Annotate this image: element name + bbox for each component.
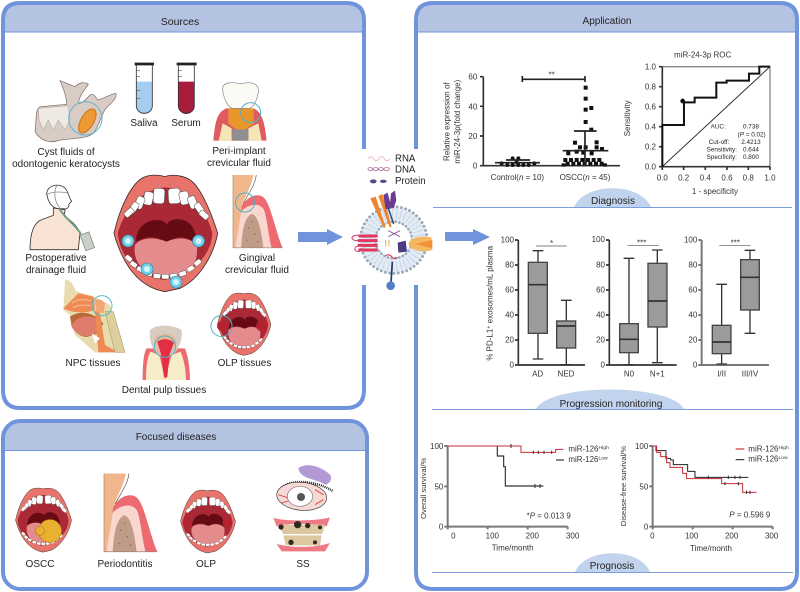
label: peri-implant crevicular fluid: Peri-implant xyxy=(212,146,266,157)
chart: overall survival: Overall survival/% xyxy=(419,458,428,519)
box plot: N0 vs N+1: 40 xyxy=(596,310,606,319)
chart: ROC curve: 0.6 xyxy=(721,174,733,183)
box plot: stage I/II vs III/IV: 40 xyxy=(688,311,698,320)
chart: miR-24-3p scatter: OSCC(n = 45) xyxy=(560,173,611,182)
chart: overall survival: miR-126 xyxy=(568,455,598,464)
legend: exosome cargo: Protein xyxy=(395,176,426,187)
chart: overall survival: 0 xyxy=(439,523,444,532)
heading: sources: Sources xyxy=(161,16,199,28)
icon: patient with drain xyxy=(30,185,95,251)
panel: application xyxy=(416,3,797,589)
box plot: AD vs NED: 100 xyxy=(501,236,515,245)
box plot: N0 vs N+1: *** xyxy=(637,238,646,247)
chart: disease-free survival: 0 xyxy=(644,523,649,532)
box plot: stage I/II vs III/IV: 60 xyxy=(688,286,698,295)
chart: overall survival: 100 xyxy=(486,531,500,540)
icon: OLP mouth xyxy=(181,490,235,553)
chart: box plots xyxy=(486,235,769,379)
icon: OSCC mouth xyxy=(16,488,72,552)
box plot: stage I/II vs III/IV: III/IV xyxy=(742,370,759,379)
chart: ROC curve: 0.8 xyxy=(645,83,657,92)
chart: miR-24-3p scatter: ** xyxy=(549,70,555,79)
chart: ROC curve: 1.0 xyxy=(645,63,657,72)
box plot: N0 vs N+1: 0 xyxy=(601,361,606,370)
box plot: N0 vs N+1: N+1 xyxy=(650,370,665,379)
legend: exosome cargo xyxy=(368,154,426,187)
chart: box plots: exosomes/mL plasma xyxy=(486,245,495,326)
chart: overall survival: *P = 0.013 9 xyxy=(527,511,571,520)
heading: focused diseases: Focused diseases xyxy=(136,432,216,443)
chart: disease-free survival: 50 xyxy=(639,482,649,491)
chart: box plots: + xyxy=(486,326,492,329)
box plot: N0 vs N+1: 100 xyxy=(592,235,606,244)
label: serum: Serum xyxy=(171,118,201,129)
section tab: diagnosis: Diagnosis xyxy=(591,196,635,207)
chart: ROC curve: 0.6 xyxy=(645,103,657,112)
chart: overall survival: 300 xyxy=(566,531,580,540)
box plot: AD vs NED: AD xyxy=(532,370,543,379)
label: OLP: OLP xyxy=(196,559,216,570)
chart: disease-free survival: 200 xyxy=(725,531,739,540)
box plot: stage I/II vs III/IV xyxy=(684,236,769,379)
chart: overall survival: miR-126 xyxy=(568,445,598,454)
box plot: stage I/II vs III/IV: 20 xyxy=(688,336,698,345)
chart: ROC curve: Cut-off: xyxy=(709,139,730,146)
chart: disease-free survival: Low xyxy=(778,455,788,461)
box plot: AD vs NED: 20 xyxy=(505,336,515,345)
chart: disease-free survival: 0 xyxy=(650,531,655,540)
chart: miR-24-3p scatter: 40 xyxy=(468,102,478,111)
chart: ROC curve: 0.0 xyxy=(657,174,668,183)
panel: focused diseases xyxy=(3,421,367,589)
chart: ROC curve: 1.0 xyxy=(764,174,776,183)
chart: ROC curve: 0.4 xyxy=(645,123,657,132)
label: saliva: Saliva xyxy=(130,118,158,129)
icon: large open mouth xyxy=(114,175,218,292)
box plot: AD vs NED: NED xyxy=(558,370,575,379)
chart: ROC curve: 1 - specificity xyxy=(692,187,738,196)
icon: exosome xyxy=(352,191,432,290)
chart: overall survival: 100 xyxy=(430,442,444,451)
chart: disease-free survival: High xyxy=(778,445,789,451)
box plot: N0 vs N+1: N0 xyxy=(624,370,635,379)
label: gingival crevicular fluid: Gingival xyxy=(239,253,275,264)
chart: miR-24-3p scatter xyxy=(442,70,620,182)
chart: ROC curve: 0.800 xyxy=(743,154,759,161)
chart: ROC curve: 0.2 xyxy=(678,174,690,183)
section tab: progression monitoring xyxy=(432,390,793,410)
icon: jaw with cyst xyxy=(35,81,116,142)
panel header: sources xyxy=(3,3,364,32)
label: postoperative drainage fluid: Postoperative xyxy=(25,253,87,264)
membrane protein: red coil xyxy=(352,235,378,251)
chart: overall survival: Low xyxy=(598,455,608,461)
label: dental pulp tissues: Dental pulp tissues xyxy=(122,385,206,396)
box plot: AD vs NED: 0 xyxy=(510,361,515,370)
chart: overall survival: 0 xyxy=(451,531,456,540)
icon: dry eye and dental caries xyxy=(273,465,333,551)
chart: overall survival: 200 xyxy=(526,531,540,540)
chart: ROC curve: 0.8 xyxy=(743,174,754,183)
receptor: purple protein xyxy=(383,191,396,224)
panel header: application xyxy=(418,3,797,32)
section tab: prognosis xyxy=(432,553,793,572)
chart: ROC curve: 0.4 xyxy=(700,174,711,183)
box plot: stage I/II vs III/IV: 100 xyxy=(684,236,698,245)
chart: miR-24-3p scatter: 20 xyxy=(468,132,478,141)
chart: ROC curve: miR-24-3p ROC xyxy=(674,50,731,59)
section tab: diagnosis xyxy=(433,188,792,208)
section tab: progression monitoring: Progression monitoring xyxy=(560,399,662,410)
label: postoperative drainage fluid: drainage fluid xyxy=(26,265,86,276)
chart: disease-free survival xyxy=(619,442,789,553)
legend: exosome cargo: DNA xyxy=(395,164,416,175)
icon: dental implant xyxy=(213,83,267,141)
legend: exosome cargo: RNA xyxy=(395,154,416,165)
chart: overall survival xyxy=(419,442,609,553)
box plot: AD vs NED: 60 xyxy=(505,286,515,295)
chart: miR-24-3p scatter: 60 xyxy=(468,73,478,82)
chart: ROC curve: 0.2 xyxy=(645,143,657,152)
label: cyst fluids: Cyst fluids of xyxy=(37,147,95,158)
chart: disease-free survival: 100 xyxy=(635,442,649,451)
icon: dental pulp xyxy=(143,326,190,380)
icon: periodontitis xyxy=(104,474,157,552)
icon: serum tube xyxy=(177,64,197,114)
section tab: prognosis: Prognosis xyxy=(590,561,634,572)
box plot: AD vs NED xyxy=(501,236,585,379)
chart: ROC curve xyxy=(623,50,776,196)
cargo: DNA, lipids, protein, RNA xyxy=(386,231,407,259)
box plot: N0 vs N+1: 20 xyxy=(596,335,606,344)
chart: disease-free survival: Disease-free survival/% xyxy=(619,446,628,526)
box plot: AD vs NED: 80 xyxy=(505,261,515,270)
icon: nasopharynx section xyxy=(63,280,125,352)
icon: OLP mouth xyxy=(211,293,271,355)
label: periodontitis: Periodontitis xyxy=(97,559,153,570)
panel header: focused diseases xyxy=(3,421,367,450)
box plot: stage I/II vs III/IV: 0 xyxy=(693,361,698,370)
chart: ROC curve: 2.4213 xyxy=(741,139,761,146)
panel: sources xyxy=(3,3,364,408)
chart: miR-24-3p scatter: 0 xyxy=(473,162,478,171)
box plot: stage I/II vs III/IV: I/II xyxy=(717,370,726,379)
membrane protein: orange channel xyxy=(408,237,432,251)
label: OLP tissues: OLP tissues xyxy=(218,358,271,369)
box plot: N0 vs N+1 xyxy=(592,235,677,379)
chart: ROC curve: 0.0 xyxy=(645,163,657,172)
chart: box plots: % PD-L1 xyxy=(486,329,495,361)
chart: ROC curve: Sensitivity: xyxy=(707,147,737,154)
chart: ROC curve: AUC: xyxy=(711,124,726,131)
chart: disease-free survival: P = 0.596 9 xyxy=(729,510,771,519)
icon: gingival crevice xyxy=(233,175,283,248)
box plot: N0 vs N+1: 80 xyxy=(596,260,606,269)
chart: ROC curve: (P = 0.02) xyxy=(738,131,766,138)
chart: overall survival: Time/month xyxy=(492,544,534,553)
icon: saliva tube xyxy=(135,64,154,114)
chart: disease-free survival: 300 xyxy=(765,531,779,540)
label: NPC tissues: NPC tissues xyxy=(65,358,121,369)
label: peri-implant crevicular fluid: crevicular fluid xyxy=(207,158,271,169)
chart: disease-free survival: miR-126 xyxy=(748,455,778,464)
box plot: AD vs NED: * xyxy=(550,239,553,248)
chart: disease-free survival: 100 xyxy=(685,531,699,540)
box plot: N0 vs N+1: 60 xyxy=(596,285,606,294)
label: OSCC: OSCC xyxy=(26,559,54,570)
chart: disease-free survival: Time/month xyxy=(690,544,732,553)
label: cyst fluids: odontogenic keratocysts xyxy=(12,159,120,170)
label: gingival crevicular fluid: crevicular fluid xyxy=(225,265,289,276)
box plot: AD vs NED: 40 xyxy=(505,311,515,320)
receptor: orange spikes xyxy=(370,194,392,228)
chart: ROC curve: Sensitivity xyxy=(623,100,632,136)
box plot: stage I/II vs III/IV: 80 xyxy=(688,261,698,270)
chart: ROC curve: Specificity: xyxy=(707,154,737,161)
label: SS: SS xyxy=(296,559,310,570)
box plot: stage I/II vs III/IV: *** xyxy=(731,238,740,247)
chart: ROC curve: 0.738 xyxy=(743,124,759,131)
chart: ROC curve: 0.644 xyxy=(743,147,759,154)
chart: overall survival: High xyxy=(598,445,609,451)
chart: miR-24-3p scatter: Control(n = 10) xyxy=(491,173,544,182)
chart: miR-24-3p scatter: miR-24-3p(fold change) xyxy=(453,79,462,164)
chart: disease-free survival: miR-126 xyxy=(748,445,778,454)
arrow: sources to exosome xyxy=(298,229,343,245)
chart: overall survival: 50 xyxy=(434,482,444,491)
chart: miR-24-3p scatter: Relative expression of xyxy=(442,82,451,161)
anchor: stalk and ball xyxy=(386,262,395,290)
arrow: exosome to application xyxy=(445,229,490,245)
heading: application: Application xyxy=(583,16,631,27)
